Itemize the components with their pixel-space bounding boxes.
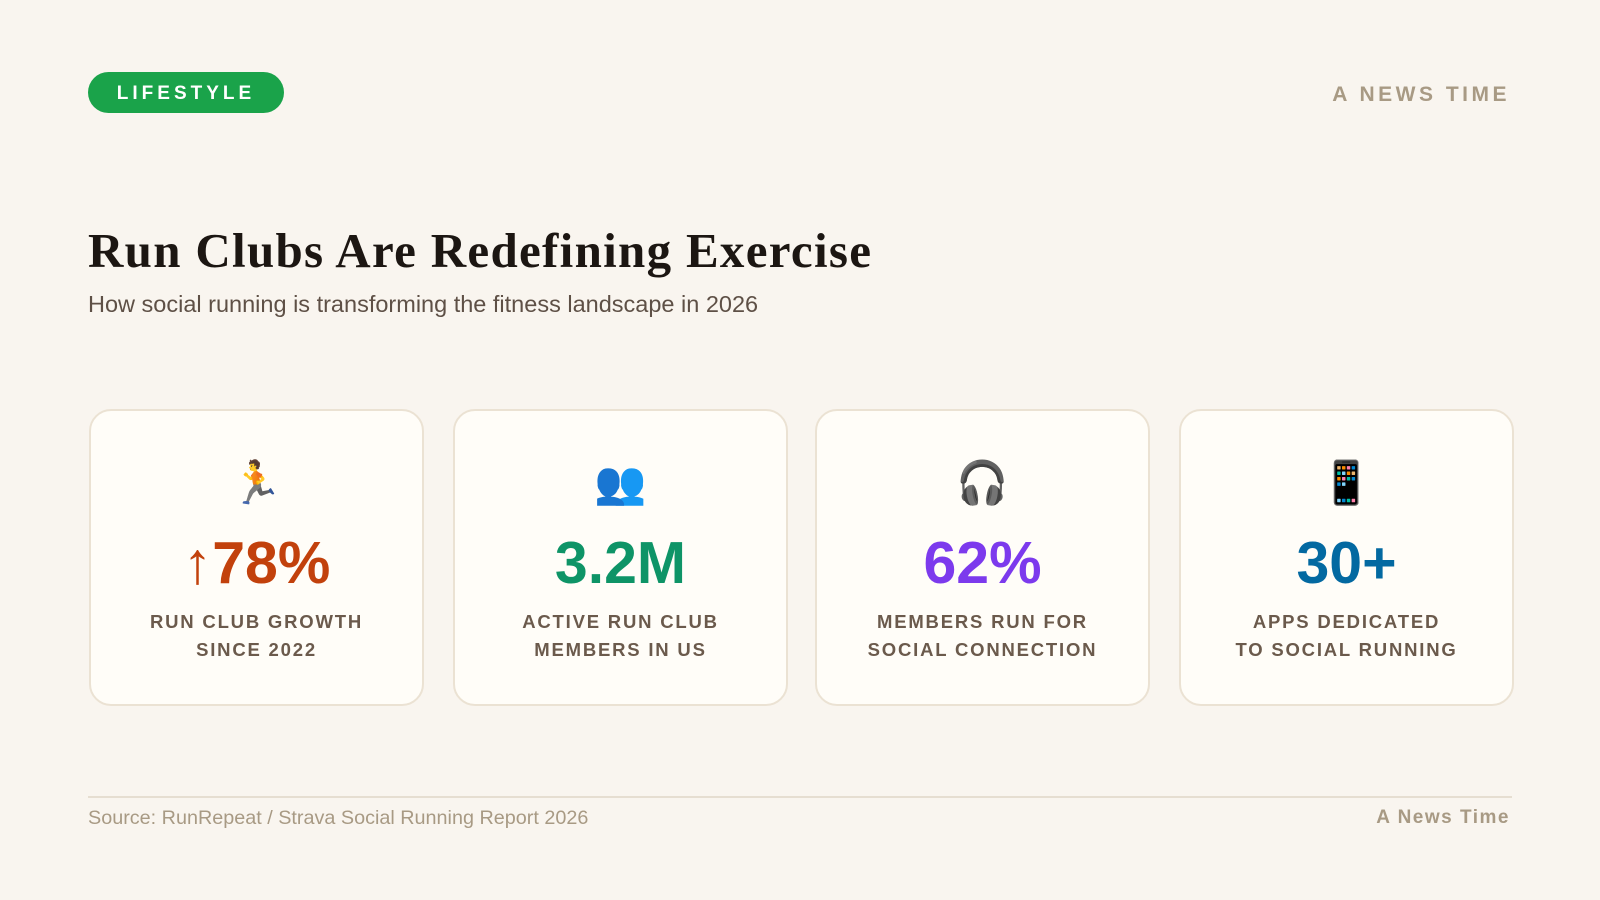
source: Source: RunRepeat / Strava Social Running Report 2026 (88, 807, 588, 829)
tag: lifestyle (88, 72, 284, 113)
card: apps (1179, 409, 1514, 706)
label: MEMBERS RUN FOR (877, 611, 1088, 632)
icon: headphones: 🎧 (956, 459, 1009, 508)
label (150, 611, 363, 660)
title: Run Clubs Are Redefining Exercise (88, 223, 872, 278)
brand top right: A NEWS TIME (1332, 83, 1510, 106)
label: ACTIVE RUN CLUB (522, 611, 719, 632)
card: members (453, 409, 788, 706)
label: RUN CLUB GROWTH (150, 611, 363, 632)
icon: people: 👥 (594, 459, 647, 508)
stat: 62% (923, 530, 1042, 596)
label: APPS DEDICATED (1253, 611, 1440, 632)
label (522, 611, 719, 660)
stat: 30+ (1296, 530, 1397, 596)
card: growth (89, 409, 424, 706)
label: SOCIAL CONNECTION (868, 639, 1097, 660)
label (1235, 611, 1458, 660)
subtitle: How social running is transforming the fitness landscape in 2026 (88, 291, 758, 317)
stat: ↑78% (183, 530, 330, 596)
icon: runner: 🏃 (230, 459, 283, 508)
icon: phone: 📱 (1320, 459, 1373, 508)
footer brand: A News Time (1376, 807, 1510, 828)
stat: 3.2M (555, 530, 686, 596)
label: TO SOCIAL RUNNING (1235, 639, 1458, 660)
card: social (815, 409, 1150, 706)
label (868, 611, 1097, 660)
tag: lifestyle: LIFESTYLE (117, 83, 255, 104)
label: SINCE 2022 (196, 639, 317, 660)
label: MEMBERS IN US (534, 639, 707, 660)
